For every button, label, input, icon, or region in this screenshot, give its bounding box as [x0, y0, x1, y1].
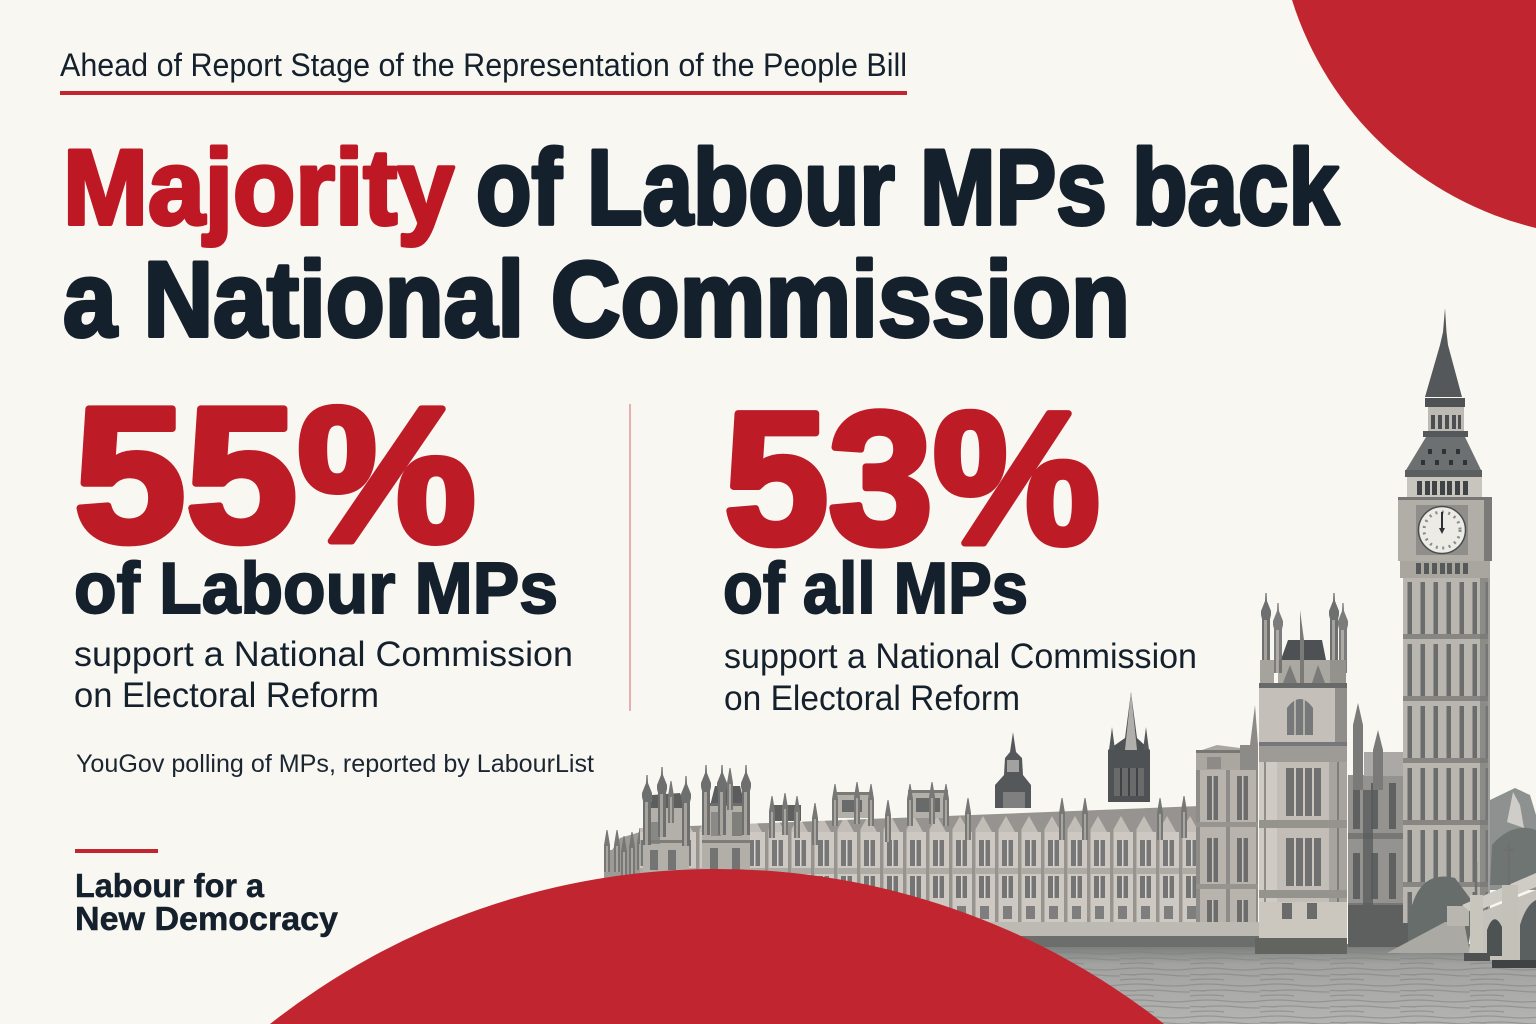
central spire tower: [995, 732, 1031, 808]
corner circle: bottom: [270, 869, 1164, 1024]
stat description: [74, 634, 573, 715]
stat description: support a National Commission: [74, 634, 573, 674]
title: of Labour MPs back: [476, 127, 1339, 247]
kicker line: Ahead of Report Stage of the Representation of the People Bill: [60, 47, 907, 83]
stat: 55%: 55%: [74, 367, 476, 582]
source note: YouGov polling of MPs, reported by LabourList: [76, 750, 594, 778]
west towers: [642, 765, 751, 874]
river water: [960, 944, 1536, 1024]
title: a National Commission: [63, 239, 1130, 359]
stat label: of Labour MPs: [74, 549, 558, 629]
title: Majority: [63, 127, 454, 247]
mid turrets: [769, 782, 1187, 845]
stat label: of all MPs: [723, 549, 1028, 629]
corner circle: top right: [1292, 0, 1536, 228]
Victoria tower: [1255, 593, 1348, 954]
Big Ben clock tower: [1398, 308, 1492, 923]
clock housing: [1398, 497, 1492, 561]
stat description: on Electoral Reform: [724, 678, 1020, 718]
spire and lantern: [1425, 308, 1462, 397]
eastern spire tower: [1108, 692, 1150, 802]
organisation signature: Labour for a: [75, 867, 265, 904]
west wing: [604, 828, 645, 880]
organisation signature: [75, 849, 339, 937]
stat panel: all MPs: [723, 373, 1197, 718]
back range and dark corner: [1348, 703, 1410, 947]
Westminster Bridge: [1387, 842, 1536, 968]
east block: [1196, 705, 1258, 922]
title: [63, 127, 1339, 359]
organisation signature: New Democracy: [75, 900, 339, 937]
stat description: on Electoral Reform: [74, 675, 379, 715]
stat: 53%: 53%: [724, 373, 1100, 583]
stat description: support a National Commission: [724, 636, 1197, 676]
photo: Houses of Parliament and Big Ben: [604, 308, 1536, 1024]
trees and distant dome: [1490, 788, 1536, 890]
main river facade: [604, 692, 1270, 947]
stat panel: Labour MPs: [74, 367, 573, 715]
clock face: [1418, 506, 1466, 554]
stat description: [724, 636, 1197, 718]
